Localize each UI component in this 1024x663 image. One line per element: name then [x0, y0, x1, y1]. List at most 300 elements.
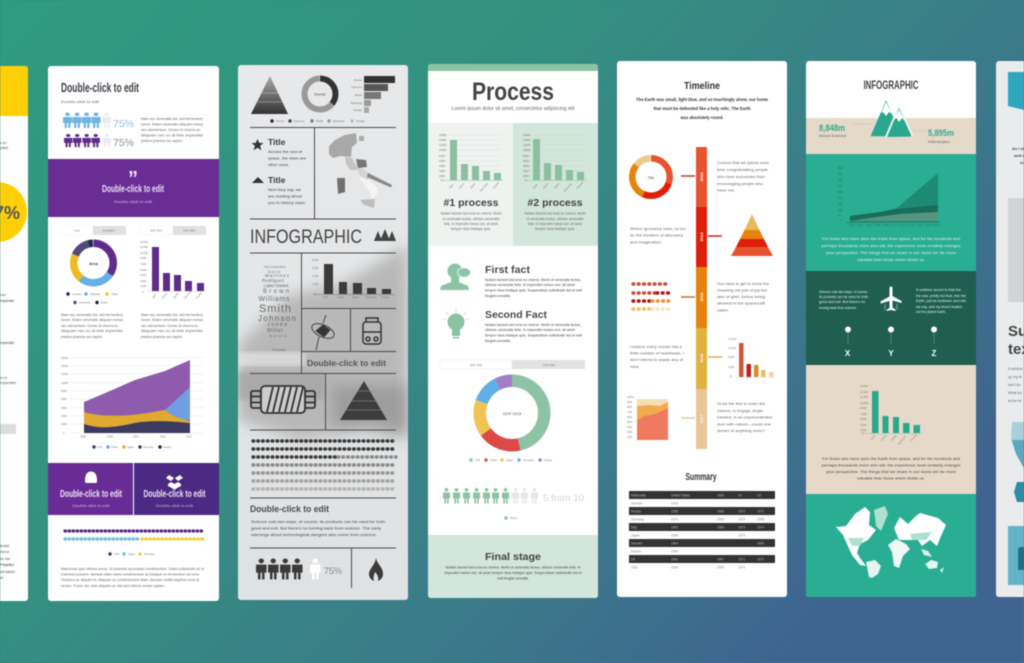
- summary table: 1959: [671, 550, 678, 554]
- word cloud: Thomas: [272, 348, 286, 352]
- summary table: UK: [631, 558, 636, 562]
- donut chart: [304, 78, 336, 110]
- icon: forest: [374, 229, 396, 241]
- stacked area chart: 3000: [61, 414, 67, 418]
- teal paragraph: valuable than those which divide us.: [857, 258, 925, 262]
- donut tabs: [61, 226, 126, 235]
- summary table: 1959: [671, 510, 678, 514]
- bar chart: purple: China: [161, 291, 168, 300]
- word cloud: Williams: [258, 296, 290, 303]
- pictogram: 5 from 10: [443, 488, 584, 504]
- bar chart: teal: 7,000: [860, 412, 867, 416]
- feature: title two: Title: [268, 175, 286, 185]
- summary table: G1: [757, 494, 761, 498]
- bar chart: teal: France: [910, 432, 918, 442]
- donut legend: Indonesia: [79, 300, 91, 304]
- summary table: 1995: [757, 542, 764, 546]
- area chart legend: Japan: [127, 445, 135, 449]
- cropped paragraph: up my th: [1008, 375, 1022, 379]
- pictogram grid: [253, 441, 396, 489]
- purple quote band: Double-click to edit: [102, 184, 164, 195]
- text: 2014: [630, 227, 686, 244]
- cropped text blocks: ttend: [0, 550, 9, 554]
- footer paragraph: Vivamus ac aliquet mi. Aliquam eu condimentum diam. Aenean mollis dapibus urna at: [61, 578, 199, 582]
- dark paragraph left: its products can be used for both: [819, 295, 868, 299]
- bar chart: teal: 10,000: [860, 401, 868, 405]
- area chart legend: France: [163, 445, 172, 449]
- subtitle: Lorem ipsum dolor sit amet, consectetur adipiscing elit: [452, 106, 575, 112]
- timeline bar: 2016: [699, 353, 704, 362]
- horizontal bar chart: Marketing: [351, 101, 363, 105]
- pictogram rows: [633, 284, 670, 309]
- bar chart: teal: China: [880, 433, 887, 442]
- feature: title one: Title: [268, 137, 286, 147]
- area chart: teal: 450: [838, 184, 843, 188]
- icon: rope: [251, 386, 315, 413]
- bar chart one: 14000: [439, 138, 447, 142]
- donut tabs: GDP 2015: [470, 363, 483, 367]
- bar chart two: 8000: [523, 154, 529, 158]
- beige paragraph: perhaps thousands more who will, the experience most certainly changes: [822, 464, 961, 468]
- bar chart: teal: 5,000: [860, 417, 867, 421]
- pictogram legend: [504, 516, 517, 520]
- text: 2017: cosmos, to engage, single-: [717, 409, 765, 413]
- bar chart two: 0: [525, 178, 527, 182]
- bar chart: grey: 6,000: [312, 266, 319, 270]
- word cloud: Martinez: [265, 273, 290, 278]
- bar chart: grey: Japan: [352, 295, 360, 299]
- pyramid chart: [251, 76, 288, 114]
- text: 2015: cabin.: [717, 308, 729, 312]
- teal paragraph: [822, 237, 961, 262]
- dark paragraph right: not the planet Earth.: [916, 310, 946, 314]
- summary table: Russia: [631, 510, 641, 514]
- paragraph: right: lorem. Etiam venenatis aliquam metus: [141, 318, 203, 322]
- donut legend: France: [544, 458, 553, 462]
- bar chart one: 16000: [439, 133, 447, 137]
- fact: second: Nullam laoreet sed eros eu viverra. Morbi ut venenatis lectus,: [485, 323, 581, 327]
- teal image box: [1008, 526, 1024, 585]
- bar chart two: 16000: [523, 133, 531, 137]
- cropped text blocks: ptant: [0, 146, 8, 150]
- area chart: teal: 500: [838, 178, 843, 182]
- photo background smear: [238, 245, 408, 440]
- donut legend: Pakistan: [90, 292, 101, 296]
- summary table: 1970: [738, 510, 745, 514]
- timeline bar: 2013: [699, 172, 704, 181]
- bar chart: purple: USA: [151, 293, 157, 300]
- bar chart tabs: GDP 2016: [183, 228, 196, 232]
- map of Italy: [329, 133, 392, 208]
- stacked area chart: orange: 90%: [627, 400, 633, 404]
- stacked area chart: orange: 20%: [627, 435, 633, 439]
- bar chart two: France: [576, 180, 584, 190]
- cropped text blocks: imperdiet: [0, 381, 16, 385]
- process card two: Nullam laoreet sed eros eu viverra. Morbi: [524, 212, 586, 216]
- summary table: 1958: [757, 518, 764, 522]
- stacked area chart: 0: [63, 431, 65, 435]
- pictogram legend: Title A: [510, 516, 517, 520]
- cropped text blocks: Phasellus: [0, 563, 14, 567]
- area chart: teal: [838, 166, 941, 227]
- area chart: teal: 550: [838, 172, 843, 176]
- bar chart one: Germany: [479, 181, 489, 193]
- text: 2014: Where ignorance lurks, so too: [630, 227, 686, 231]
- bar chart: teal: [860, 384, 922, 446]
- paragraph: Nam nec venenatis dui, sed fermentum: [141, 117, 203, 121]
- paragraph: left: Nam nec venenatis dui, sed fermentum: [61, 313, 123, 317]
- paragraph: left: nec elementum. Donec id viverra ex.: [61, 324, 119, 328]
- teal figure: [1018, 547, 1024, 570]
- dark paragraph right: the sea, pretty but fear, into the: [916, 294, 966, 298]
- summary table: United States: [671, 494, 691, 498]
- stacked area chart: 16000: [61, 356, 69, 360]
- intro text: was absolutely round.: [680, 115, 724, 120]
- word cloud: Hernandez: [264, 265, 286, 269]
- bar chart: purple: France: [195, 290, 203, 300]
- word cloud: Davis: [268, 270, 280, 274]
- donut tabs: GDP 2016: [543, 363, 556, 367]
- stacked area chart: 6000: [61, 397, 67, 401]
- final stage section: velit feugiat convallis.: [497, 576, 529, 580]
- cropped heading: [1008, 323, 1024, 358]
- bar chart two: 3000: [523, 169, 529, 173]
- word cloud: Rodriguez: [262, 278, 285, 283]
- bar chart: grey: 4,000: [312, 274, 319, 278]
- pictogram: purple people 75%: [64, 134, 134, 149]
- cropped paragraph: don't kn: [1008, 383, 1020, 387]
- final stage section: Nullam laoreet sed eros eu viverra. Morbi ut venenatis lectus, ultrices venenatis felis. In: [446, 566, 580, 570]
- chart legend: Media: [316, 119, 324, 123]
- donut legend: China: [111, 292, 118, 296]
- summary table: 1970: [671, 518, 678, 522]
- chart legend: Harmony: [294, 119, 305, 123]
- paragraph: [251, 520, 385, 537]
- cropped bold text: m: [1020, 160, 1024, 165]
- stat: Everest: 8,848m: [819, 123, 845, 134]
- paragraph: good and evil. But there's no turning back from science. The early: [251, 526, 381, 530]
- word cloud: Jones: [267, 322, 287, 328]
- bar chart: purple: 10,000: [140, 251, 148, 255]
- feature: title one: other suns.: [268, 163, 289, 167]
- stacked area chart: 2009: [107, 434, 113, 438]
- pictogram legend: USA: [114, 552, 120, 556]
- paragraph: left: pretium pharetra nec sapien.: [61, 335, 103, 339]
- paragraph: right: Aliquam nec ex at felis imperdiet: [141, 329, 203, 333]
- pictogram legend: [108, 552, 155, 556]
- bar chart one: 6000: [439, 159, 445, 163]
- bar chart: purple: Japan: [172, 291, 180, 300]
- text: 2015: You have to get to know the: [717, 282, 769, 286]
- bar chart two: USA: [532, 183, 538, 190]
- beige paragraph: For those who have seen the Earth from space, and for the hundreds and: [822, 457, 960, 461]
- dark paragraph right: A sublime secret is that the: [916, 288, 961, 292]
- bar chart one: [439, 133, 503, 193]
- bar chart: grey: 0: [314, 291, 316, 295]
- bar chart: teal: 2,000: [860, 428, 867, 432]
- summary table: 1955: [717, 518, 724, 522]
- cropped text blocks: nar: [0, 293, 7, 297]
- cropped text blocks: di: [0, 576, 3, 580]
- word cloud: Brown: [263, 289, 289, 295]
- North America: [836, 507, 876, 566]
- stacked area chart: [61, 356, 203, 438]
- summary table: 1959: [671, 534, 678, 538]
- summary table: 1964: [671, 542, 678, 546]
- stacked area chart: orange: 60%: [627, 415, 633, 419]
- pin X: [845, 326, 851, 358]
- summary table: USA: [631, 566, 638, 570]
- bar chart two: 2000: [523, 174, 529, 178]
- donut legend: USA: [475, 458, 481, 462]
- stacked area chart: 4000: [61, 406, 67, 410]
- donut label: Source: [314, 92, 326, 96]
- bar chart two: 10000: [523, 148, 531, 152]
- summary table: Sweden: [631, 542, 643, 546]
- fact: second: feugiat convallis.: [485, 339, 511, 343]
- bar chart two: 4000: [523, 164, 529, 168]
- icon: paddle raft: [310, 315, 336, 350]
- word cloud: Johnson: [258, 314, 296, 323]
- stacked area chart: 8000: [61, 389, 67, 393]
- horizontal bar chart: Media: [355, 93, 363, 97]
- pin Y: Y: [888, 349, 894, 358]
- summary table: Nationality: [631, 494, 646, 498]
- dark paragraph right: Earth, just as sunbeam and rain: [916, 299, 966, 303]
- horizontal bar chart: Foreign: [353, 108, 363, 112]
- Central Asia highlight: [910, 532, 932, 540]
- purple card: android: Double-click to edit: [72, 504, 110, 508]
- stat: Everest: [819, 123, 871, 138]
- summary table: Italy: [631, 526, 637, 530]
- bar chart: teal: 11,000: [860, 395, 868, 399]
- feature: title two: [268, 175, 306, 205]
- stat: Everest: Mount Everest: [819, 134, 846, 138]
- icon: light bulb: [443, 309, 469, 338]
- process card two: felis. In imperdiet metus orci, sit amet: [528, 222, 582, 226]
- summary table: Germany: [631, 518, 645, 522]
- icon: star: [252, 139, 264, 150]
- beige mountains section: [806, 118, 976, 154]
- pin Z: [931, 326, 937, 358]
- panel: cropped light template: [996, 61, 1024, 597]
- stacked area chart: 2011: [160, 434, 166, 438]
- area chart: teal: 600: [838, 166, 843, 170]
- bar chart: teal: USA: [870, 434, 876, 441]
- chart legend: Foreign: [356, 119, 365, 123]
- intro text: The Earth was small, light blue, and so touchingly alone, our home: [636, 97, 769, 102]
- summary table: 1970: [738, 534, 745, 538]
- stacked area chart: 2012: [186, 434, 192, 438]
- bar chart: purple: 2,000: [140, 279, 147, 283]
- pictogram rows: [65, 531, 204, 539]
- fact: first: First fact: [485, 264, 531, 276]
- word cloud: Smith: [259, 303, 291, 315]
- paragraph: nec elementum. Donec id viverra ex.: [141, 128, 201, 132]
- Australia: [925, 560, 938, 569]
- bar chart one: 8000: [439, 154, 445, 158]
- area chart legend: Germany: [143, 445, 154, 449]
- donut legend: [469, 458, 553, 462]
- summary table: 1970: [738, 518, 745, 522]
- bar chart: orange: 4,000: [728, 365, 735, 369]
- bar chart: grey: [312, 258, 395, 299]
- summary table: 1959: [717, 494, 724, 498]
- pictogram: 5 from 10: 5 from 10: [543, 493, 584, 504]
- chart legend: Source: [276, 119, 285, 123]
- stacked area chart: orange: 40%: [627, 425, 633, 429]
- purple card: android: Double-click to edit: [60, 489, 122, 500]
- bar chart: grey: USA: [323, 295, 329, 299]
- process card one: ut venenatis lectus, ultrices venenatis: [442, 217, 500, 221]
- bar chart one: 3000: [439, 169, 445, 173]
- donut label: Title: [647, 176, 655, 180]
- pictogram: blue people 75%: [63, 112, 134, 130]
- summary table: 1971: [738, 558, 745, 562]
- icon: backpack: [363, 318, 381, 344]
- pictogram legend: Germany: [144, 552, 155, 556]
- bar chart: purple: 5,000: [140, 268, 147, 272]
- bar chart: purple: [140, 240, 206, 300]
- area chart: teal: 300: [838, 196, 843, 200]
- bar chart: purple: Germany: [183, 288, 193, 300]
- icon: dropbox: [166, 475, 183, 490]
- summary table: 1972: [757, 558, 764, 562]
- bar chart one: Japan: [469, 181, 477, 190]
- pin Y: [888, 326, 894, 358]
- process card two: #2 process: [528, 198, 583, 209]
- fact: second: [485, 309, 582, 343]
- heading: summary: Summary: [686, 472, 717, 483]
- grey tab: [0, 424, 16, 434]
- process card two: [513, 123, 598, 246]
- panel: teal infographic template: [806, 61, 976, 597]
- purple card: dropbox: [134, 463, 219, 515]
- process card two: ut venenatis lectus, ultrices venenatis: [526, 217, 584, 221]
- footer paragraph: ornare. Fusce nec ante aliquam ac nisl sed ultrices ornare sapien.: [61, 584, 165, 588]
- process card two: tempor risus tristique quis.: [535, 227, 575, 231]
- bar chart one: 2000: [439, 174, 445, 178]
- summary table: 1970: [738, 526, 745, 530]
- stacked area chart: orange: 50%: [627, 420, 633, 424]
- bar chart: purple: 12,000: [140, 245, 148, 249]
- stacked area chart: 10000: [61, 381, 69, 385]
- process card one: tempor risus tristique quis.: [451, 227, 491, 231]
- paragraph: right: pretium pharetra nec sapien.: [141, 335, 183, 339]
- pictogram: blue people 75%: 75%: [113, 118, 134, 130]
- world map: [836, 506, 946, 578]
- cropped text blocks: ta sed: [0, 544, 9, 548]
- dark paragraph left: [819, 290, 868, 310]
- horizontal bar chart: Source: [354, 78, 363, 82]
- fact: second: ultrices venenatis felis. In imperdiet metus orci, sit amet: [485, 328, 575, 332]
- summary table: 1962: [671, 526, 678, 530]
- stacked area chart: orange: 100%: [627, 395, 634, 399]
- donut legend: Germany: [523, 458, 534, 462]
- beige paragraph: your perspective. The things that we share in our world are far more: [826, 470, 956, 474]
- bar chart one: 10000: [439, 148, 447, 152]
- final stage section: imperdiet metus orci, sit amet tempor risus tristique quis. Suspendisse sollicitudin dui id: [444, 571, 582, 575]
- cropped paragraph: at the M: [1008, 399, 1021, 403]
- text: 2016: don't intend to waste any of: [630, 358, 683, 362]
- bar chart: grey: 2,000: [312, 282, 319, 286]
- fact: first: Nullam laoreet sed eros eu viverra. Morbi ut venenatis lectus,: [485, 278, 581, 282]
- purple card: android: [48, 463, 133, 515]
- summary table: 1961: [671, 558, 678, 562]
- stat: Kilimanjaro: [912, 128, 954, 144]
- bar chart: orange: 14,000: [728, 337, 736, 341]
- text: 2017: [717, 402, 772, 433]
- bar chart: orange: 0: [730, 374, 732, 378]
- cropped bold text: [1012, 146, 1024, 165]
- bar chart: purple: 0: [142, 290, 144, 294]
- bar chart two: 12000: [523, 143, 531, 147]
- stacked area chart: orange: 70%: [627, 410, 633, 414]
- stacked area chart: 2000: [61, 422, 67, 426]
- feature: title one: [268, 137, 306, 167]
- cropped bold text: As I st: [1012, 146, 1024, 151]
- feature: title two: you in history class.: [268, 201, 306, 205]
- yellow header: [0, 66, 28, 116]
- donut tabs: Population: [103, 228, 116, 232]
- paragraph: Aliquam nec ex at felis imperdiet: [141, 134, 203, 138]
- bar chart: grey: France: [381, 295, 390, 299]
- paragraph: pretium pharetra nec sapien.: [141, 139, 183, 143]
- bar chart: teal: 14,000: [860, 384, 868, 388]
- purple quote band: Double-click to edit: [114, 200, 152, 204]
- area chart: teal: 400: [838, 190, 843, 194]
- donut tabs: [440, 360, 585, 369]
- area chart: teal: 100: [838, 208, 843, 212]
- bar chart: grey: 8,000: [312, 258, 319, 262]
- icon: mountain: [252, 177, 264, 183]
- fact: second: tempor risus tristique quis. Suspendisse sollicitudin dui id velit: [485, 334, 582, 338]
- purple quote band: [48, 159, 219, 217]
- paragraph: left: Aliquam nec ex at felis imperdiet: [61, 329, 123, 333]
- donut legend: Japan: [506, 458, 514, 462]
- text: 2014: and imagination.: [630, 240, 662, 244]
- cropped text blocks: ta nar: [0, 557, 11, 561]
- stacked area chart: orange: 80%: [627, 405, 633, 409]
- USA highlight: [848, 538, 864, 546]
- text: 2017: duel with nature—could one: [717, 422, 771, 426]
- footer paragraph: [61, 567, 204, 588]
- bar chart: orange: 8,000: [728, 355, 735, 359]
- area chart: teal: 1990 1992 1994 1996 1998 2000 2002 2004 2006 2008 2010: [848, 223, 941, 227]
- cropped text blocks: mm: [0, 376, 7, 380]
- text: 2013: [717, 161, 769, 192]
- final stage section: Final stage: [485, 552, 541, 563]
- summary table: Japan: [631, 534, 640, 538]
- cropped map: [1011, 422, 1024, 502]
- bar chart: teal: 4,000: [860, 423, 867, 427]
- panel: grey monochrome template: [238, 65, 408, 600]
- summary table: 1969: [717, 510, 724, 514]
- pyramid: dark: [340, 381, 387, 420]
- text: 2016: [630, 345, 684, 369]
- stat: Kilimanjaro: Kilimanjaro: [928, 140, 950, 144]
- teal banner: [1008, 72, 1024, 110]
- bar chart two: 6000: [523, 159, 529, 163]
- bar chart: teal: Germany: [897, 434, 907, 446]
- text: 2016: I believe every human has a: [630, 345, 682, 349]
- text: 2014: do the frontiers of discovery: [630, 234, 683, 238]
- bar chart two: 14000: [523, 138, 531, 142]
- text: 2017: dream of anything more?: [717, 429, 765, 433]
- bar chart tabs: [140, 226, 206, 235]
- bar chart: purple: 7,000: [140, 262, 147, 266]
- final stage section: [428, 535, 598, 598]
